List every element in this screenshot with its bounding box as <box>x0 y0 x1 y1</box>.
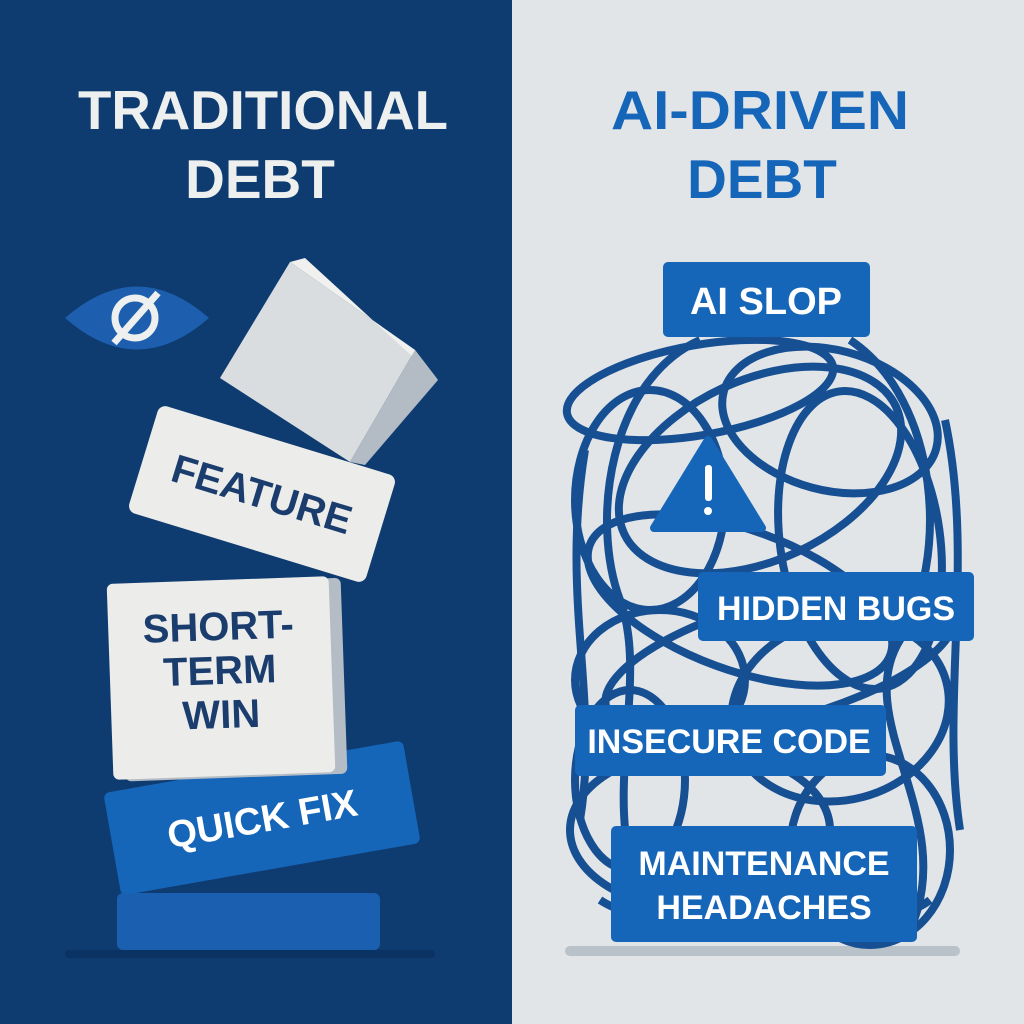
title: traditional debt: TRADITIONAL <box>78 79 448 141</box>
block: bottom slab <box>117 893 380 950</box>
block: quick fix <box>103 740 421 896</box>
icon: eye with null sign <box>65 286 209 350</box>
block: short-term win <box>107 576 347 782</box>
title: ai-driven debt: DEBT <box>687 148 837 210</box>
block: feature <box>127 404 397 584</box>
label: ai slop: AI SLOP <box>690 281 842 323</box>
chart: tangled code <box>559 322 970 945</box>
label: hidden bugs <box>698 572 974 641</box>
shadow: tangle base <box>565 946 960 956</box>
label: insecure code: INSECURE CODE <box>587 723 871 761</box>
title: traditional debt: DEBT <box>185 148 335 210</box>
block: short-term win: WIN <box>182 692 261 738</box>
panel: traditional debt background <box>0 0 512 1024</box>
icon: warning triangle <box>654 440 762 528</box>
title: traditional debt <box>78 79 448 210</box>
block: short-term win: SHORT- <box>142 602 295 652</box>
title: ai-driven debt: AI-DRIVEN <box>611 79 909 141</box>
label: maintenance headaches: MAINTENANCE <box>638 845 890 883</box>
block: tumbling cube <box>220 258 438 465</box>
label: insecure code <box>575 705 886 776</box>
label: maintenance headaches: HEADACHES <box>656 889 872 927</box>
panel: ai-driven debt background <box>512 0 1024 1024</box>
shadow base <box>65 950 435 958</box>
label: maintenance headaches <box>611 826 917 942</box>
title: ai-driven debt <box>611 79 909 210</box>
label: hidden bugs: HIDDEN BUGS <box>717 590 955 628</box>
label: ai slop <box>663 262 870 337</box>
block: quick fix: QUICK FIX <box>164 782 361 857</box>
block: feature: FEATURE <box>166 447 357 543</box>
block: short-term win: TERM <box>162 647 277 695</box>
